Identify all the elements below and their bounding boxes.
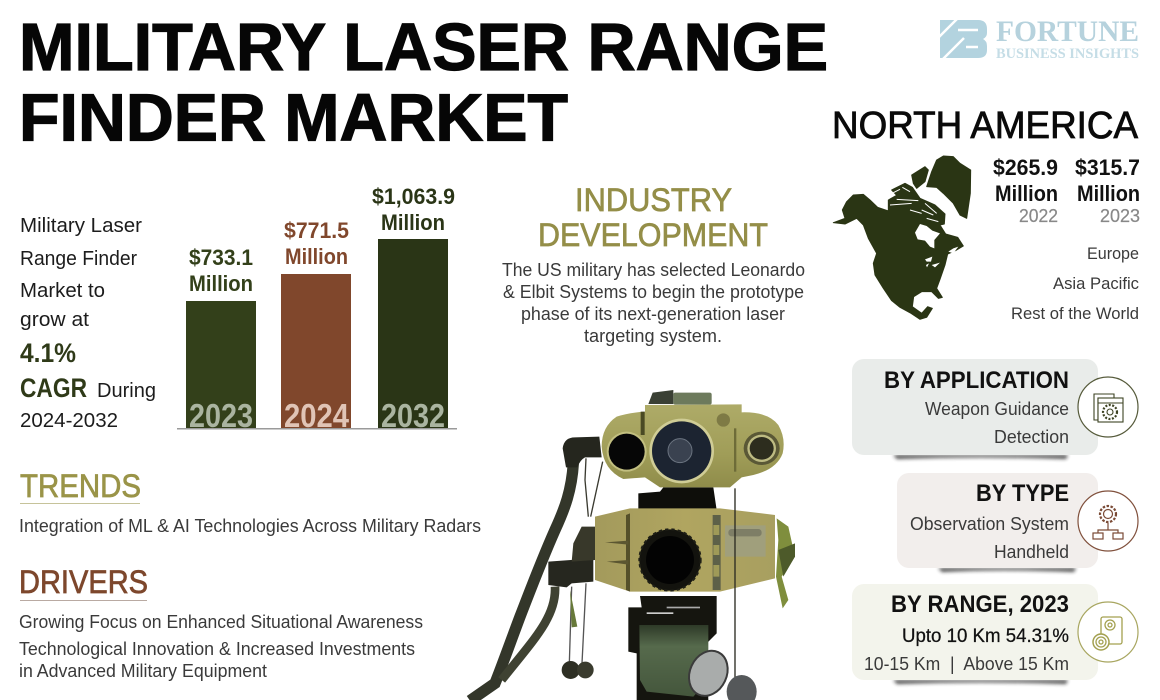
list: other regions: Asia Pacific	[1053, 274, 1139, 293]
panel: market growth text: During	[97, 380, 156, 402]
transparent covers	[682, 644, 735, 700]
panel: trends: TRENDS	[20, 468, 141, 504]
bar: 2023: 2023	[189, 397, 253, 434]
panel: drivers: Growing Focus on Enhanced Situational Awareness	[19, 612, 423, 632]
panel: trends: Integration of ML & AI Technologies Across Military Radars	[19, 516, 481, 536]
icon: targets	[1078, 602, 1138, 662]
lower mount	[628, 596, 717, 700]
panel: market growth text: Range Finder	[20, 248, 137, 270]
panel: by range: BY RANGE, 2023	[891, 591, 1069, 618]
bar: 2024: $771.5	[284, 218, 349, 243]
panel: market growth text: Market to	[20, 280, 105, 302]
bar: 2023: $733.1	[189, 245, 253, 270]
panel: trends	[19, 468, 481, 536]
top cap	[648, 390, 673, 404]
large lens	[639, 529, 701, 591]
bar chart	[177, 184, 457, 434]
bar: 2023	[186, 245, 256, 434]
icon: gear hierarchy	[1078, 491, 1138, 551]
bar: 2032: $1,063.9	[372, 184, 455, 209]
panel: drivers	[19, 564, 423, 681]
panel: by type: BY TYPE	[976, 480, 1069, 507]
title: FINDER MARKET	[19, 80, 568, 156]
bar: 2032: Million	[381, 210, 445, 235]
list: other regions: Europe	[1087, 244, 1139, 263]
image: military laser range finder device	[470, 390, 795, 700]
panel: by application: Detection	[994, 427, 1069, 447]
text block: development description: & Elbit Systems to begin the prototype	[503, 282, 804, 302]
heading: north america: NORTH AMERICA	[832, 105, 1139, 147]
text block: development description	[502, 260, 805, 346]
panel: by type: Handheld	[994, 542, 1069, 562]
icon: gear window	[1078, 377, 1138, 437]
lenses	[607, 432, 647, 472]
panel: by application: Weapon Guidance	[925, 399, 1069, 419]
strap	[776, 518, 795, 608]
bar: 2024: Million	[285, 244, 348, 269]
cables	[470, 463, 573, 700]
heading: industry development: INDUSTRY	[575, 182, 732, 218]
middle neck	[638, 487, 717, 510]
mid housing	[595, 508, 775, 592]
bar: 2032	[372, 184, 455, 434]
text block: development description: phase of its next-generation laser	[521, 304, 785, 324]
map: north america	[833, 156, 971, 319]
bar: 2032: 2032	[381, 397, 445, 434]
panel: market growth text: Military Laser	[20, 215, 142, 237]
logo: Fortune Business Insights: BUSINESS INSIGHTS	[996, 46, 1139, 62]
title: MILITARY LASER RANGE	[19, 10, 828, 85]
stat: 2022: $265.9	[993, 155, 1058, 180]
panel: by range: Upto 10 Km 54.31%	[902, 626, 1069, 647]
panel: by application	[852, 359, 1138, 459]
panel: industry development	[502, 182, 805, 346]
title	[19, 10, 828, 156]
bar: 2024	[281, 218, 351, 434]
upper housing	[602, 404, 784, 487]
heading: industry development: DEVELOPMENT	[538, 217, 768, 253]
bar: 2023: Million	[189, 271, 253, 296]
panel: drivers: Technological Innovation & Increased Investments	[19, 639, 415, 659]
panel: by type: Observation System	[910, 514, 1069, 534]
Arctic channels	[890, 187, 938, 222]
logo: Fortune Business Insights: FORTUNE	[996, 15, 1139, 48]
connectors	[563, 437, 602, 467]
text block: development description: targeting system.	[584, 326, 722, 346]
heading: industry development	[538, 182, 768, 253]
panel: market growth text	[20, 215, 156, 432]
list: other regions	[1011, 244, 1139, 323]
panel: by range: 10-15 Km | Above 15 Km	[864, 654, 1069, 674]
stat: 2023: Million	[1077, 181, 1140, 206]
panel: by application: BY APPLICATION	[884, 367, 1069, 394]
stat: 2022: 2022	[1019, 206, 1058, 226]
panel: drivers: in Advanced Military Equipment	[19, 661, 267, 681]
stat: 2023: $315.7	[1075, 155, 1140, 180]
panel: market growth text: CAGR	[20, 373, 87, 403]
logo: Fortune Business Insights	[938, 15, 1139, 62]
Hudson Bay	[915, 224, 940, 248]
stat: 2022	[993, 155, 1058, 226]
stat: 2023: 2023	[1100, 206, 1140, 226]
panel: by type	[897, 473, 1138, 572]
panel: drivers: DRIVERS	[19, 564, 148, 600]
icon: FB logo mark	[938, 19, 987, 60]
list: other regions: Rest of the World	[1011, 304, 1139, 323]
panel: market growth text: 4.1%	[20, 338, 76, 368]
panel: regional values	[993, 155, 1140, 323]
text block: development description: The US military has selected Leonardo	[502, 260, 805, 280]
panel: by range	[852, 584, 1138, 684]
bar: 2024: 2024	[284, 397, 350, 434]
panel: market growth text: grow at	[20, 309, 89, 331]
stat: 2022: Million	[995, 181, 1058, 206]
stat: 2023	[1075, 155, 1140, 226]
panel: market growth text: 2024-2032	[20, 410, 118, 432]
